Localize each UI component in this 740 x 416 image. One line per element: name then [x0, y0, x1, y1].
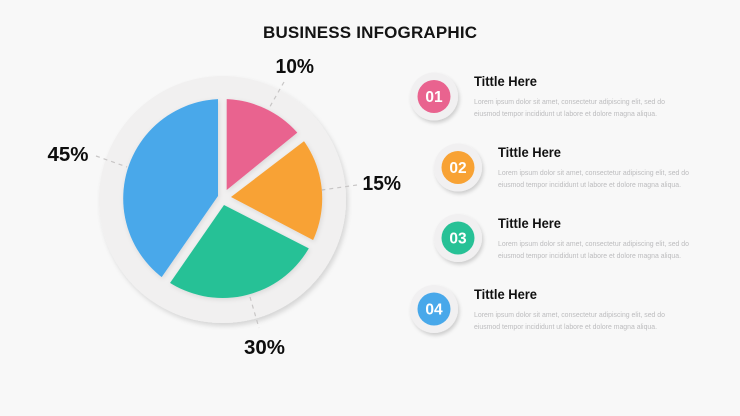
title: BUSINESS INFOGRAPHIC [263, 23, 477, 42]
badge: 03: 03 [449, 230, 467, 248]
label: 30%: 30% [244, 337, 285, 359]
body: 01: Lorem ipsum dolor sit amet, consectetur adipiscing elit, sed do [474, 97, 665, 106]
slices [123, 99, 324, 300]
badge: 02: 02 [449, 160, 467, 177]
pie chart [96, 76, 357, 328]
label: 10%: 10% [276, 56, 314, 78]
body: 02: Lorem ipsum dolor sit amet, consectetur adipiscing elit, sed do [498, 168, 689, 177]
heading: 04: Tittle Here [474, 287, 537, 302]
body: 02: eiusmod tempor incididunt ut labore et dolore magna aliqua. [498, 180, 681, 189]
body: 04: Lorem ipsum dolor sit amet, consectetur adipiscing elit, sed do [474, 310, 665, 319]
slice: 10% pink [226, 99, 298, 190]
heading: 03: Tittle Here [498, 216, 561, 231]
item 02 [434, 144, 689, 192]
slice: 45% blue [123, 99, 220, 278]
heading: 02: Tittle Here [498, 145, 561, 160]
slice: 15% orange [231, 141, 324, 241]
badge: 04: 04 [425, 302, 443, 318]
label: 45%: 45% [48, 144, 89, 166]
badge: 04 [410, 285, 458, 333]
badge: 03 [434, 214, 482, 262]
item 04 [410, 285, 665, 333]
label: 15%: 15% [362, 173, 401, 195]
pie backing disc [99, 76, 346, 323]
body: 04: eiusmod tempor incididunt ut labore et dolore magna aliqua. [474, 322, 657, 331]
item 03 [434, 214, 689, 262]
badge: 02 [434, 144, 482, 192]
body: 01: eiusmod tempor incididunt ut labore et dolore magna aliqua. [474, 109, 657, 118]
leader lines [96, 82, 357, 328]
body: 03: eiusmod tempor incididunt ut labore et dolore magna aliqua. [498, 251, 681, 260]
slice: 30% green [170, 205, 310, 300]
item 01 [410, 72, 665, 120]
badge: 01: 01 [425, 89, 443, 106]
heading: 01: Tittle Here [474, 74, 537, 89]
badge: 01 [410, 72, 458, 120]
body: 03: Lorem ipsum dolor sit amet, consectetur adipiscing elit, sed do [498, 239, 689, 248]
